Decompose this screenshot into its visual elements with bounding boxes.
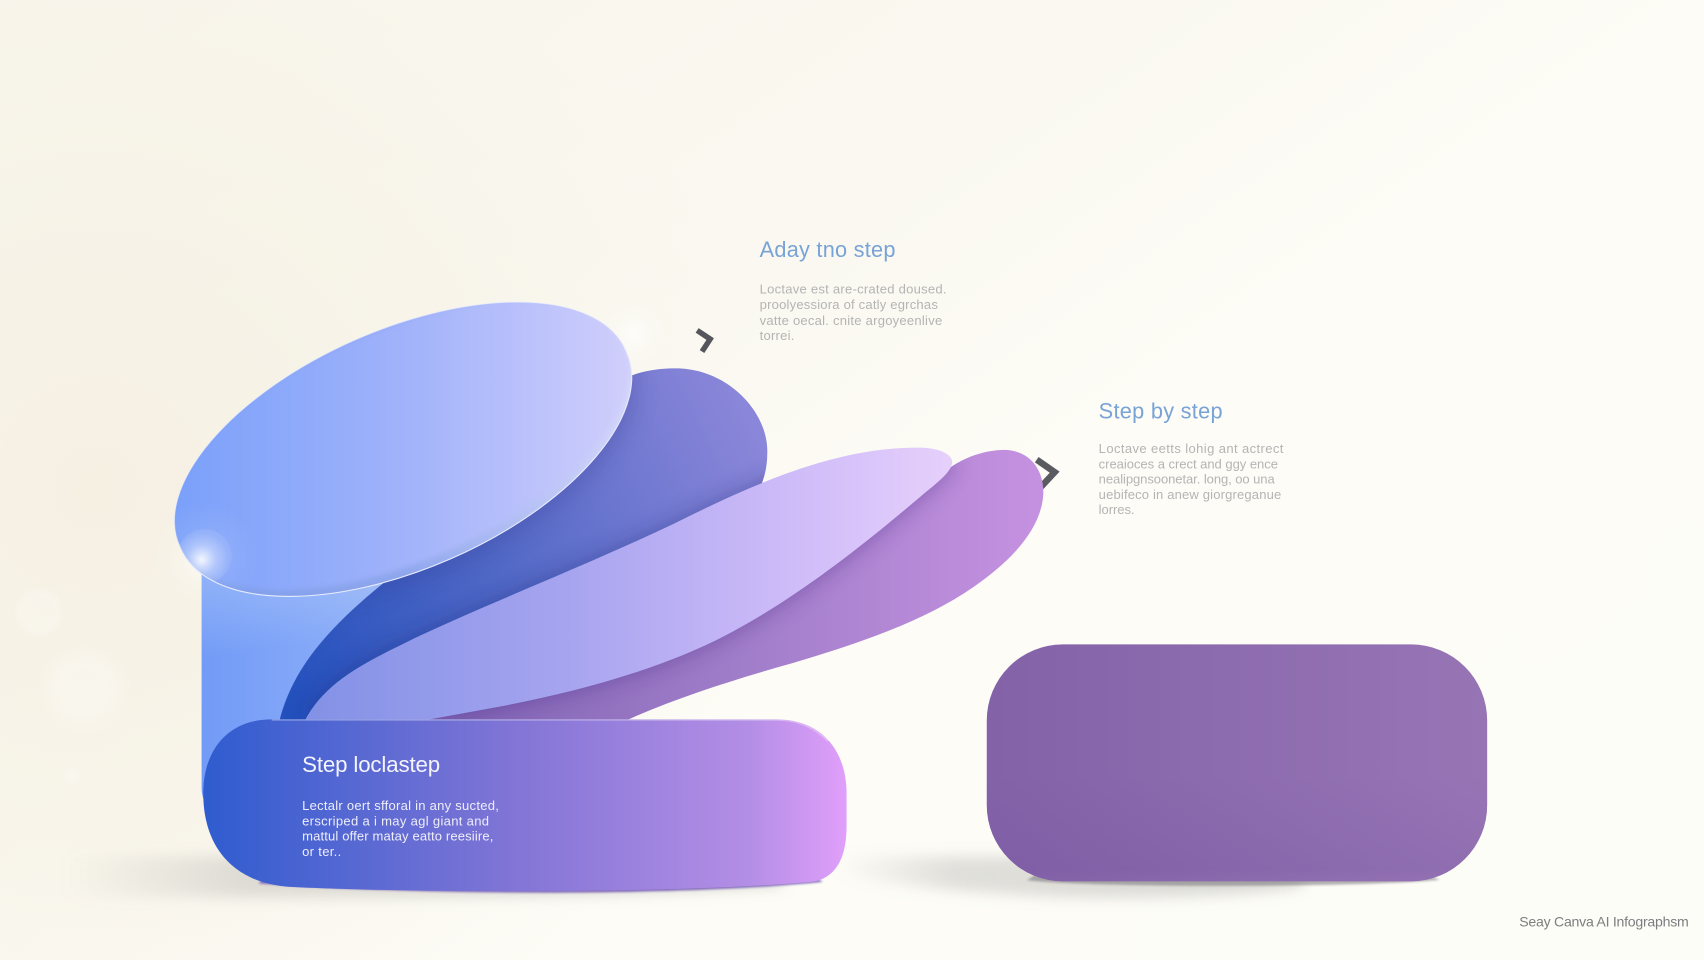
text block: pill description (302, 798, 499, 859)
text block: first description: vatte oecal. cnite argoyeenlive (760, 313, 942, 328)
text block: first description: proolyessiora of catly egrchas (760, 297, 938, 312)
text block: pill description: or ter.. (302, 844, 341, 859)
disc glow (178, 526, 234, 582)
panel: right purple pill (987, 644, 1487, 886)
text block: second description: nealipgnsoonetar. long, oo una (1099, 472, 1275, 487)
text block: second description: uebifeco in anew giorgreganue (1099, 487, 1281, 502)
shadow on purple from lilac (432, 462, 959, 720)
ground shadows (65, 856, 1304, 898)
text block: first description: Loctave est are-crated doused. (760, 281, 947, 296)
text block: first description: torrei. (760, 328, 794, 343)
text block: second description (1099, 441, 1284, 517)
text block: pill description: erscriped a i may agl giant and (302, 813, 489, 828)
petal: purple (417, 450, 1043, 722)
heading: step by step: Step by step (1099, 398, 1223, 423)
text block: pill description: mattul offer matay eatto reesiire, (302, 829, 493, 844)
text block: second description: Loctave eetts lohig ant actrect (1099, 441, 1284, 456)
ellipse: top disc (173, 301, 632, 596)
text block: second description: lorres. (1099, 502, 1135, 517)
heading: step loclastep: Step loclastep (302, 752, 440, 777)
decorative glows (16, 299, 668, 784)
arrow: second chevron (1037, 460, 1055, 488)
arrow: first chevron (697, 330, 710, 352)
text block: first description (760, 281, 947, 343)
layered petal shapes (150, 301, 1043, 810)
panel: bottom gradient pill (203, 719, 847, 893)
footer credit: Seay Canva AI Infographsm (1519, 913, 1689, 929)
petal: indigo (279, 368, 767, 722)
cylinder: blue base (202, 565, 456, 810)
ellipse shadow (373, 374, 640, 593)
text block: second description: creaioces a crect and ggy ence (1099, 456, 1278, 471)
text block: pill description: Lectalr oert sfforal in any sucted, (302, 798, 499, 813)
heading: aday tno step: Aday tno step (760, 237, 895, 262)
shadow on indigo from lilac (307, 470, 766, 715)
petal: lilac (304, 448, 952, 722)
